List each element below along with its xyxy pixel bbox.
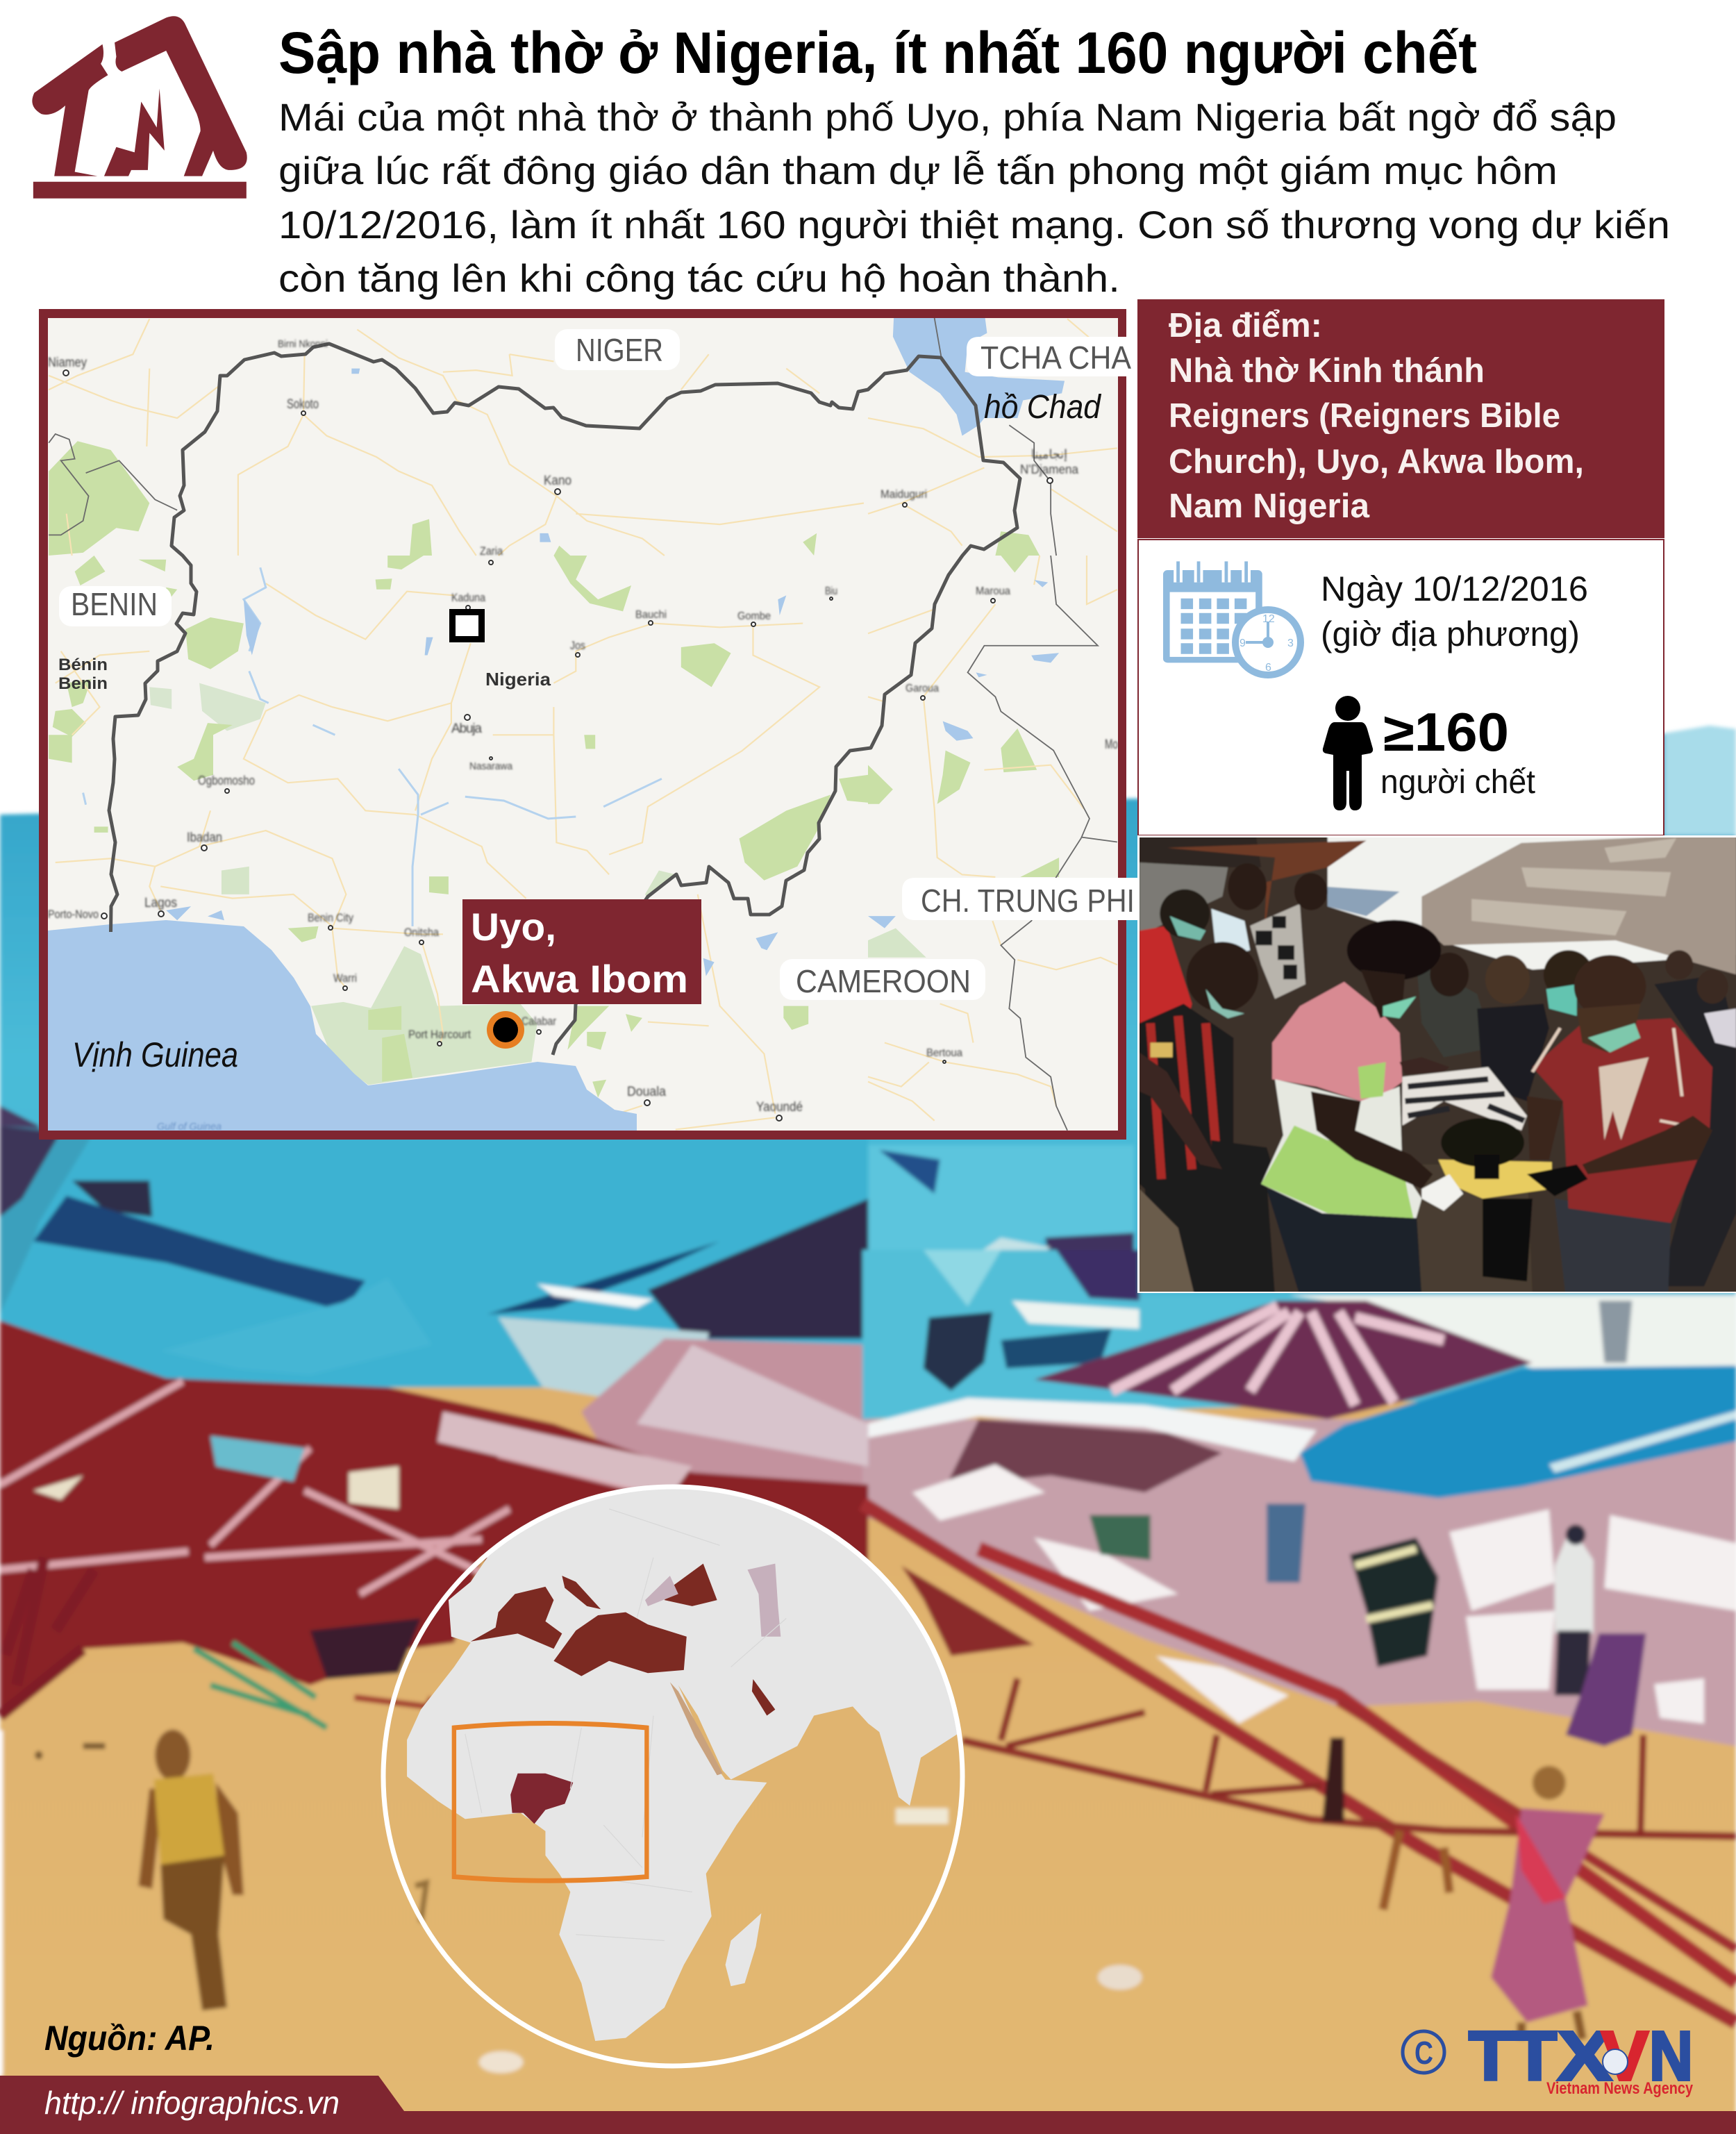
city labels: Bauchi — [635, 609, 667, 621]
photo: rescuers carrying a victim — [1134, 833, 1736, 1296]
city labels: Kaduna — [451, 591, 485, 604]
panel: location info: Church), Uyo, Akwa Ibom, — [1169, 443, 1584, 481]
panel: location info: Địa điểm: — [1169, 307, 1322, 344]
logo: TTXVN — [1403, 2017, 1694, 2098]
city labels: Mo — [1105, 737, 1118, 752]
Nigeria — [510, 1774, 573, 1824]
city dots — [63, 370, 1053, 1121]
panel: location info: Nam Nigeria — [1169, 487, 1370, 525]
icon: calendar with clock — [1163, 561, 1262, 662]
callout: Uyo, Akwa Ibom: Akwa Ibom — [471, 957, 688, 1001]
panel: date and toll: 3 — [1287, 637, 1294, 649]
city labels: إنجامينا — [1031, 447, 1067, 461]
inset globe: Nigeria location — [381, 1485, 965, 2068]
text block: intro: Mái của một nhà thờ ở thành phố Uyo, phía Nam Nigeria bất ngờ đổ sập — [278, 95, 1617, 139]
city labels: Douala — [627, 1085, 666, 1099]
logo: TTXVN: C — [1414, 2035, 1433, 2071]
country label: Bénin — [58, 656, 108, 693]
city labels: Benin City — [308, 911, 353, 924]
date text — [1321, 569, 1588, 653]
label: hồ Chad: hồ Chad — [984, 389, 1101, 426]
Nigeria border — [109, 344, 1020, 1055]
city labels: Warri — [333, 972, 357, 985]
callout: Uyo, Akwa Ibom: Uyo, — [471, 905, 556, 949]
city labels: Porto-Novo — [48, 908, 99, 921]
city labels: Gulf of Guinea — [157, 1121, 222, 1133]
city labels: Lagos — [144, 896, 177, 910]
city labels: Maiduguri — [880, 487, 927, 501]
text block: intro — [278, 95, 1670, 300]
city labels: Birni Nkonni — [278, 338, 328, 350]
city labels: Ibadan — [187, 831, 222, 845]
footer bar: http:// infographics.vn — [44, 2085, 340, 2121]
city labels: Kano — [544, 474, 571, 488]
panel: date and toll — [1138, 540, 1664, 835]
callout: Uyo, Akwa Ibom — [462, 899, 701, 1004]
stat label: người chết — [1380, 764, 1535, 801]
marker square: Kaduna area — [453, 612, 482, 639]
panel: date and toll: 6 — [1265, 662, 1271, 674]
logo: TTXVN: X — [1558, 2017, 1612, 2095]
text block: intro: còn tăng lên khi công tác cứu hộ hoàn thành. — [278, 256, 1120, 300]
city labels: Jos — [570, 639, 585, 652]
Mediterranean and inland seas — [471, 1564, 775, 1775]
city labels: N'Djamena — [1020, 462, 1079, 476]
country label: Nigeria: Nigeria — [485, 669, 551, 690]
panel: location info: Nhà thờ Kinh thánh — [1169, 352, 1485, 390]
title: Sập nhà thờ ở Nigeria, ít nhất 160 người chết — [278, 20, 1477, 85]
city labels: Nasarawa — [469, 760, 513, 772]
background photo: collapsed church — [0, 726, 1736, 2134]
date text: (giờ địa phương) — [1321, 615, 1580, 653]
label: Vịnh Guinea: Vịnh Guinea — [72, 1035, 238, 1074]
city labels: Zaria — [480, 544, 503, 558]
logo: TTXVN: Vietnam News Agency — [1546, 2079, 1694, 2098]
label: CH. TRUNG PHI: CH. TRUNG PHI — [921, 883, 1135, 919]
city labels: Gombe — [737, 610, 771, 622]
icon: collapsed house — [32, 16, 247, 199]
city labels: Onitsha — [404, 926, 439, 939]
city labels: Niamey — [48, 356, 87, 370]
city labels: Yaoundé — [756, 1100, 803, 1115]
stat: at least 160: ≥160 — [1383, 701, 1509, 762]
inset frame — [454, 1723, 646, 1881]
source: Nguồn: AP. — [44, 2019, 215, 2058]
label: NIGER: NIGER — [576, 332, 663, 368]
footer bar — [0, 2076, 1736, 2134]
date text: Ngày 10/12/2016 — [1321, 569, 1588, 608]
icon: person — [1323, 696, 1373, 810]
city labels: Abuja — [451, 722, 482, 736]
panel: location info — [1137, 299, 1664, 538]
text block: intro: 10/12/2016, làm ít nhất 160 người thiệt mạng. Con số thương vong dự kiến — [278, 203, 1670, 247]
city labels: Calabar — [521, 1015, 556, 1028]
label: TCHA CHA: TCHA CHA — [980, 340, 1131, 376]
label: BENIN: BENIN — [71, 586, 158, 622]
logo: TTXVN: TT — [1469, 2017, 1557, 2095]
label: CAMEROON: CAMEROON — [796, 963, 971, 999]
city labels: Garoua — [905, 683, 939, 694]
panel: date and toll: 12 — [1262, 613, 1275, 625]
map base features — [48, 312, 1117, 1131]
city labels: Maroua — [976, 585, 1010, 597]
city labels: Port Harcourt — [408, 1028, 471, 1041]
city labels: Biu — [825, 585, 837, 597]
marker: Uyo location — [487, 1011, 524, 1049]
logo: TTXVN: V — [1601, 2017, 1649, 2095]
country label: Bénin: Benin — [58, 674, 108, 693]
text block: intro: giữa lúc rất đông giáo dân tham dự lễ tấn phong một giám mục hôm — [278, 149, 1558, 192]
globe land mass — [407, 1489, 957, 2041]
logo: TTXVN: N — [1649, 2017, 1693, 2095]
city labels: Bertoua — [926, 1047, 962, 1059]
panel: date and toll: 9 — [1240, 637, 1246, 649]
city labels: Ogbomosho — [198, 774, 255, 787]
panel: location info: Reigners (Reigners Bible — [1169, 397, 1560, 435]
city labels: Sokoto — [287, 397, 319, 412]
city labels — [48, 338, 1118, 1133]
country label: Bénin: Bénin — [58, 656, 108, 674]
panel: location map — [39, 309, 1137, 1140]
